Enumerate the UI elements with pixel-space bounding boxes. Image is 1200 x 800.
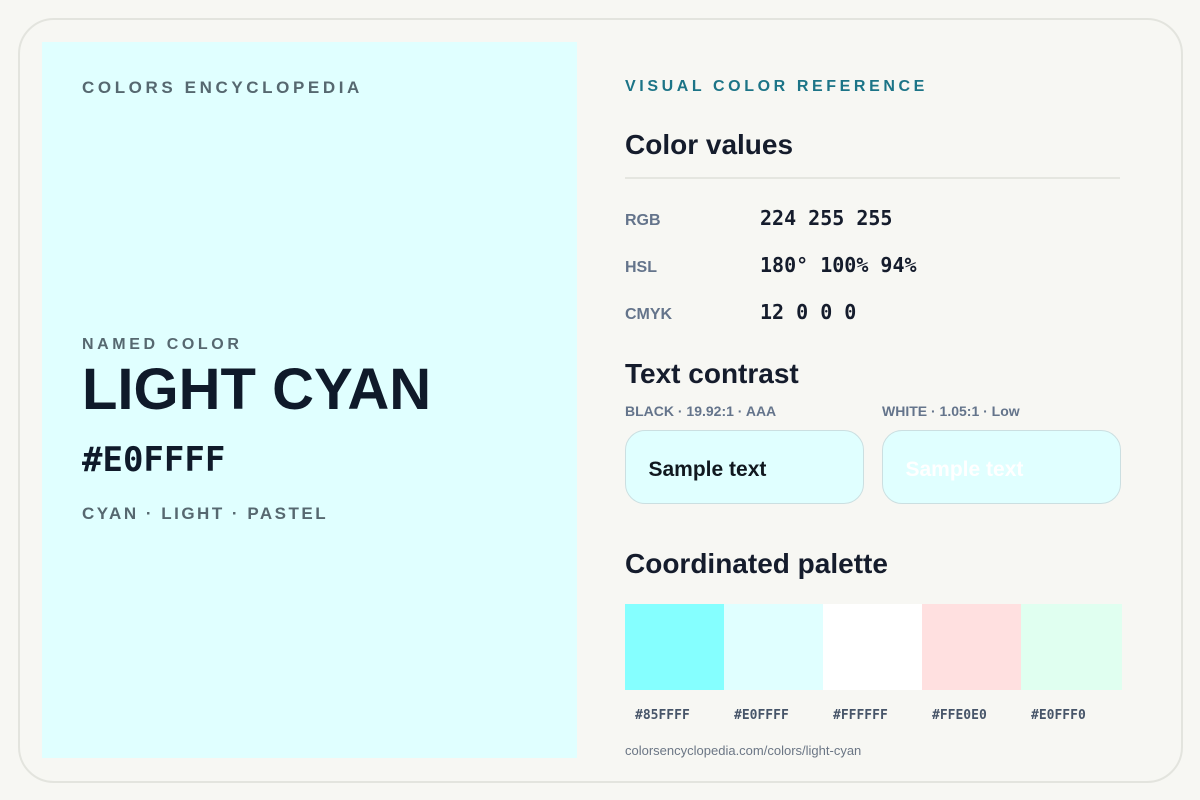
heading: text contrast: Text contrast xyxy=(625,358,799,389)
eyebrow: named color: NAMED COLOR xyxy=(82,336,242,353)
sample: white text: Sample text xyxy=(906,458,1023,480)
row: RGB xyxy=(625,206,892,230)
caption: black contrast: BLACK · 19.92:1 · AAA xyxy=(625,403,776,419)
sample: white text xyxy=(882,430,1121,504)
brand label: COLORS ENCYCLOPEDIA xyxy=(82,78,363,97)
swatch 85FFFF xyxy=(625,604,724,690)
source url: colorsencyclopedia.com/colors/light-cyan xyxy=(625,743,861,758)
row: HSL: HSL xyxy=(625,259,657,276)
sample: black text: Sample text xyxy=(648,458,766,480)
row: RGB: RGB xyxy=(625,212,661,229)
row: CMYK: CMYK xyxy=(625,306,672,323)
row: CMYK: 12 0 0 0 xyxy=(760,300,856,324)
heading: coordinated palette: Coordinated palette xyxy=(625,548,888,579)
palette hex labels: #E0FFFF xyxy=(734,708,789,723)
palette hex labels: #E0FFF0 xyxy=(1031,708,1086,723)
swatch FFE0E0 xyxy=(922,604,1021,690)
row: HSL xyxy=(625,253,917,277)
sample: black text xyxy=(625,430,864,504)
palette swatches xyxy=(625,604,1122,690)
caption: white contrast: WHITE · 1.05:1 · Low xyxy=(882,403,1020,419)
eyebrow: visual color reference: VISUAL COLOR REFERENCE xyxy=(625,78,928,95)
color tags: CYAN · LIGHT · PASTEL xyxy=(82,504,328,523)
color name: LIGHT CYAN xyxy=(82,357,431,422)
row: RGB: 224 255 255 xyxy=(760,206,892,230)
palette hex labels: #FFE0E0 xyxy=(932,708,987,723)
palette hex labels: #85FFFF xyxy=(635,708,690,723)
row: CMYK xyxy=(625,300,856,324)
heading: color values: Color values xyxy=(625,129,793,160)
swatch FFFFFF xyxy=(823,604,922,690)
row: HSL: 180° 100% 94% xyxy=(760,253,917,277)
palette hex labels: #FFFFFF xyxy=(833,708,888,723)
palette hex labels xyxy=(635,708,1086,723)
hex value: #E0FFFF xyxy=(82,440,225,480)
swatch E0FFF0 xyxy=(1021,604,1122,690)
panel: color swatch xyxy=(42,42,576,758)
swatch E0FFFF xyxy=(724,604,823,690)
